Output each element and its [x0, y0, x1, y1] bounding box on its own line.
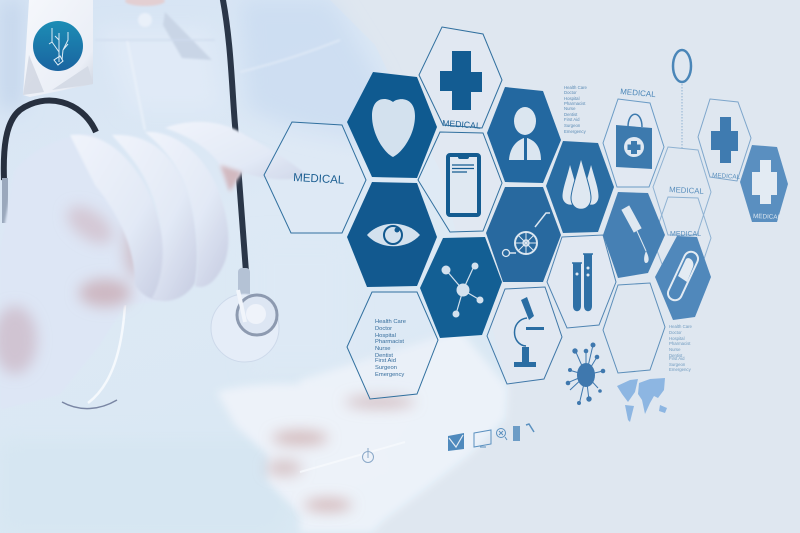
text list: right: Doctor [669, 330, 682, 335]
icon: wheelchair [502, 213, 550, 256]
hexagon panel cluster [264, 27, 788, 399]
icon: search [496, 428, 507, 440]
stethoscope tube [222, 0, 246, 272]
finger: index [165, 122, 306, 190]
icon: monitor [474, 430, 491, 447]
coat body [0, 0, 508, 533]
icon: handset [526, 424, 534, 432]
text list: right: First Aid [669, 356, 685, 361]
hexagon: first aid bag [603, 99, 664, 187]
hexagon: syringe [603, 192, 665, 278]
text list: right: Surgeon [669, 362, 686, 367]
collar details [95, 0, 340, 130]
coat shading [0, 0, 392, 533]
icon: cross [440, 51, 482, 110]
icon: microscope [514, 297, 544, 367]
logo tab [23, 0, 93, 97]
text list: right: Dentist [669, 353, 683, 358]
text list: top: First Aid [564, 117, 580, 122]
text list: right [669, 324, 693, 372]
coat cuff [300, 330, 508, 533]
icon: ring and dotted connector [673, 50, 691, 150]
text list: Surgeon [375, 365, 397, 371]
hexagon: stacked outline [653, 197, 711, 280]
icon: phone [513, 426, 520, 441]
icon: eye [367, 224, 420, 246]
hand shadows [0, 199, 146, 374]
back of hand [0, 134, 170, 410]
text list: top: Health Care [564, 85, 588, 90]
hexagon: person [487, 87, 561, 183]
text list: Dentist [375, 353, 393, 359]
icon: clipboard [448, 153, 479, 215]
hexagon: MEDICAL right outline [653, 147, 711, 235]
finger: little [70, 135, 168, 299]
gloved fist [0, 122, 306, 410]
icon: world map [617, 378, 667, 422]
text list: Nurse [375, 346, 390, 352]
hexagon: MEDICAL right outline: MEDICAL [669, 185, 705, 196]
hexagon: solid right cross: MEDICAL [753, 213, 782, 221]
icon: envelope [448, 433, 464, 451]
icon: heart [372, 99, 415, 157]
photo: doctor in white coat [0, 0, 508, 533]
text list: top: Emergency [564, 129, 587, 134]
hexagon: medical cross outline: MEDICAL [442, 118, 481, 131]
text list: top: Hospital [564, 96, 580, 101]
icon: water drops [562, 158, 599, 209]
transparent lower hand [217, 384, 418, 514]
hexagon: solid right cross [740, 145, 788, 222]
text list: top: Dentist [564, 112, 578, 117]
heading: MEDICAL above bag: MEDICAL [620, 87, 657, 99]
text list: top [564, 85, 588, 134]
text list: top: Nurse [564, 106, 576, 111]
finger: middle [145, 132, 228, 287]
icon: syringe [622, 206, 649, 263]
logo circle [33, 21, 83, 71]
hexagon: stacked outline: MEDICAL [670, 231, 701, 238]
icon: person [509, 107, 541, 160]
text list: Emergency [375, 372, 404, 378]
text list: First Aid [375, 358, 396, 364]
hexagon: drops [546, 141, 614, 233]
text list: Health Care [375, 319, 406, 325]
text list: right: Emergency [669, 367, 692, 372]
text list: top: Doctor [564, 90, 577, 95]
hexagon: empty outline [603, 283, 665, 373]
icon: power [362, 448, 374, 462]
finger: ring [112, 135, 197, 301]
hexagon: eye [347, 182, 437, 287]
text list: right: Pharmacist [669, 341, 691, 346]
hexagon: heart [347, 72, 437, 178]
text list: right: Hospital [669, 336, 685, 341]
hexagon: medical cross outline [419, 27, 502, 131]
stethoscope lower loop [88, 305, 125, 403]
text list: Hospital [375, 333, 396, 339]
text list: right: Nurse [669, 347, 681, 352]
text list: top: Pharmacist [564, 101, 586, 106]
text list [375, 319, 406, 378]
text list: Doctor [375, 326, 392, 332]
hexagon: clipboard outline [418, 132, 502, 232]
hexagon: microscope [487, 287, 562, 384]
icon: virus [566, 342, 605, 405]
hexagon: wheelchair [486, 187, 561, 282]
hexagon: text list [347, 292, 438, 399]
text list: right: Health Care [669, 324, 693, 329]
icon: pill [666, 249, 700, 303]
hexagon: MEDICAL large outline: MEDICAL [293, 172, 345, 187]
hexagon: small cross outline: MEDICAL [712, 172, 741, 181]
hexagon: small cross outline [698, 99, 751, 181]
hexagon: molecule [420, 237, 502, 338]
text list: top: Surgeon [564, 123, 581, 128]
hexagon: MEDICAL large outline [264, 122, 366, 233]
hexagon: pill [655, 236, 711, 320]
icon: first aid bag [616, 114, 652, 169]
icon: molecule [442, 262, 484, 318]
hexagon: test tubes [547, 235, 616, 328]
stethoscope chest piece [211, 290, 279, 362]
icon: test tubes [572, 254, 593, 311]
text list: Pharmacist [375, 339, 404, 345]
